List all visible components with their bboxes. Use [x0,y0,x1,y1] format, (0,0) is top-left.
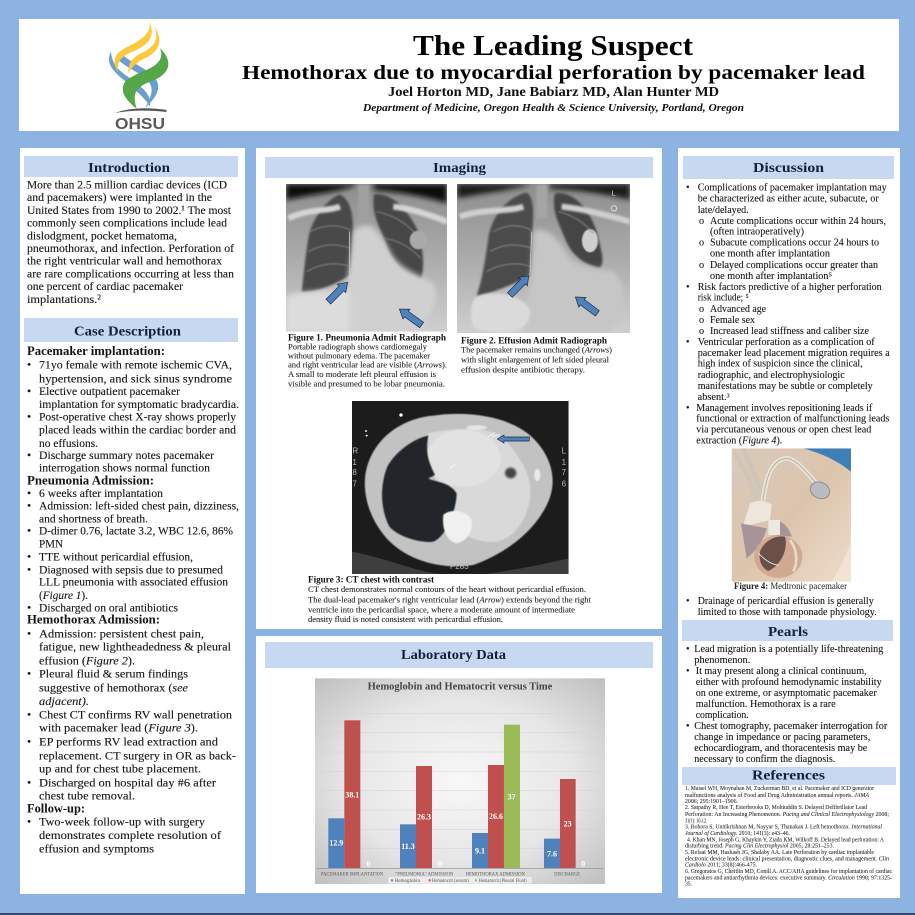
text block: pneumonia admission: • [27,600,31,614]
text block: references: 35. [685,881,692,888]
text block: hemothorax admission: EP performs RV lead extraction and [39,734,218,748]
bars: pacemaker implantation [328,720,370,868]
caption: figure 1: A small to moderate left pleural effusion is [288,369,437,379]
text block: pneumonia admission: Diagnosed with sepsis due to presumed [39,562,223,576]
panel: discussion, pearls and references [678,148,900,898]
text block: discussion: (often intraoperatively) [710,227,804,238]
text block: introduction [27,178,234,306]
text block: follow-up: Follow-up: [27,802,85,816]
text block: pacemaker implantation: • [27,448,31,462]
text block: pneumonia admission: 6 weeks after implantation [39,486,163,500]
caption: figure 2 [461,335,612,374]
figure 3: CT chest: R [352,446,358,455]
text block: hemothorax admission: suggestive of hemothorax (see [39,680,189,694]
text block: discussion: Complications of pacemaker implantation may [698,183,888,194]
text block: pneumonia admission: and shortness of breath. [39,512,148,526]
figure 3: CT chest: 1 [352,458,357,467]
bars: discharge: 0 [581,859,585,868]
caption: figure 1 [288,333,447,388]
text block: discussion: Delayed complications occur greater than [710,260,878,271]
text block: discussion: Increased lead stiffness and caliber size [710,326,869,337]
text block: discussion: o [699,304,704,315]
text block: pacemaker implantation: Pacemaker implantation: [27,344,165,358]
text block: pacemaker implantation: 71yo female with remote ischemic CVA, [39,358,232,372]
caption: figure 2: Figure 2. Effusion Admit Radiograph [461,335,607,345]
panel: laboratory data [256,636,662,893]
text block: introduction: are rare complications occurring at less than [27,266,234,280]
text block: discussion: o [699,315,704,326]
bars: pacemaker implantation: 12.9 [329,839,343,848]
heading: Laboratory Data: Laboratory Data [401,648,506,663]
text block: introduction: one percent of cardiac pacemaker [27,279,183,293]
text block: pearls [686,644,888,765]
bars: hemothorax admission [472,725,520,868]
caption: figure 3: ventricle into the pericardial space, where a moderate amount of intermediate [308,604,575,614]
text block: discussion: radiographic, and electrophysiologic [698,370,845,381]
text block: introduction: dislodgment, pocket hematoma, [27,228,177,242]
text block: pacemaker implantation: • [27,410,31,424]
text block: follow-up: effusion and symptoms [39,842,154,856]
text block: hemothorax admission: • [27,708,31,722]
text block: introduction: the right ventricular wall and hemothorax [27,254,222,268]
text block: follow-up [27,802,221,856]
heading: Imaging: Imaging [433,161,486,176]
heading: Introduction [24,156,238,177]
figure 3: CT chest: 7 [352,480,357,489]
text block: drainage bullet: limited to those with tamponade physiology. [698,607,877,618]
heading: Case Description: Case Description [74,324,181,340]
bars: pneumonia admission: 0 [438,859,442,868]
text block: pneumonia admission: • [27,498,31,512]
icon: OHSU logo [109,21,168,133]
heading: Introduction: Introduction [88,161,170,176]
text block: references: 31(1): 10-12. [685,817,707,824]
text block: pearls: complication. [696,710,749,721]
figure 2: effusion admit radiograph [457,184,630,333]
text block: pneumonia admission: PMN [39,536,63,550]
text block: pearls: echocardiogram, and thoracentesis may be [694,743,868,754]
text block: pneumonia admission: TTE without pericardial effusion, [39,550,193,564]
caption: figure 2: with slight enlargement of left sided pleural [461,354,610,364]
legend: Hematocrit (serum) [432,879,469,884]
text block: references: 2006; 295:1901–1906. [685,798,738,805]
text block: references: malfunctions analysis of Food and Drug Administration annual reports. JAMA [685,792,869,799]
bars: discharge: 7.6 [547,849,557,858]
text block: discussion: be characterized as either acute, subacute, or [698,194,879,205]
text block: discussion: o [699,238,704,249]
text block: introduction: and pacemakers) were implanted in the [27,190,212,204]
arrow [324,278,352,306]
affiliation: Department of Medicine, Oregon Health & Science University, Portland, Oregon [362,103,744,114]
icon: OHSU logo: OHSU [115,116,165,133]
text block: pearls: Lead migration is a potentially life-threatening [694,644,883,655]
text block: pacemaker implantation: Discharge summary notes pacemaker [39,448,214,462]
text block: introduction: pneumothorax, and infection. Perforation of [27,241,234,255]
text block: discussion: Subacute complications occur 24 hours to [710,238,879,249]
text block: discussion: functional or extraction of malfunctioning leads [696,414,889,425]
text block: pneumonia admission [27,474,239,614]
arrow [572,292,601,318]
text block: discussion: o [699,260,704,271]
arrow [396,304,425,330]
text block: pacemaker implantation [27,344,239,474]
text block: introduction: commonly seen complications include lead [27,216,227,230]
text block: discussion: • [686,282,690,293]
text block: references: 2. Satpathy R, Hee T, Esterbrooks D, Mohiuddin S. Delayed Defibrillator Lead [685,804,868,811]
bar chart: hemoglobin and hematocrit versus time [315,678,605,884]
text block: discussion: o [699,216,704,227]
text block: pacemaker implantation: • [27,384,31,398]
text block: discussion: pacemaker lead placement migration requires a [698,348,890,359]
text block: discussion: via percutaneous venous or open chest lead [696,425,871,436]
text block: pneumonia admission: Admission: left-sided chest pain, dizziness, [39,498,239,512]
text block: hemothorax admission: Admission: persistent chest pain, [39,626,204,640]
text block: references: 1. Maisel WH, Moynahan M, Zuckerman BD, et al. Pacemaker and ICD generator [685,785,875,792]
text block: discussion: • [686,183,690,194]
bars: discharge [544,779,585,868]
text block: discussion: high index of suspicion since the clinical, [698,359,863,370]
text block: hemothorax admission: effusion (Figure 2). [39,654,135,668]
text block: references: 6. Gregoratos G, Cheitlin MD, Conill A. ACC/AHA guidelines for implantation of cardiac [685,868,892,875]
text block: hemothorax admission: replacement. CT surgery in OR as back- [39,748,236,762]
caption: figure 3: Figure 3: CT chest with contrast [308,574,434,584]
arrow [497,435,529,443]
text block: follow-up: demonstrates complete resolution of [39,828,221,842]
text block: discussion: Risk factors predictive of a higher perforation [698,282,882,293]
figure 3: CT chest: 1 [562,458,567,467]
text block: discussion: manifestations may be subtle or completely [698,381,874,392]
text block: pacemaker implantation: Post-operative chest X-ray shows properly [39,410,236,424]
text block: discussion [686,183,890,447]
text block: hemothorax admission: adjacent). [39,694,89,708]
text block: pneumonia admission: • [27,562,31,576]
text block: pacemaker implantation: implantation for symptomatic bradycardia. [39,397,239,411]
figure 3: CT chest: L [562,446,567,455]
text block: pearls: change in impedance or pacing parameters, [694,732,870,743]
bars: hemothorax admission: 9.1 [475,847,485,856]
text block: hemothorax admission: Hemothorax Admission: [27,612,160,626]
text block: pearls: • [686,721,690,732]
text block: hemothorax admission: up and for chest tube placement. [39,762,201,776]
arrow [506,272,533,299]
title: The Leading Suspect [413,30,693,62]
text block: pneumonia admission: (Figure 1). [39,588,88,602]
caption: figure 1: without pulmonary edema. The pacemaker [288,350,430,360]
text block: discussion: absent.³ [698,392,730,403]
text block: hemothorax admission: Discharged on hospital day #6 after [39,776,216,790]
caption: figure 2: The pacemaker remains unchanged (Arrows) [461,345,612,355]
text block: references: 3. Bohora S, Unnikrishnan M, Nayyar S, Thanakan J. Left hemothorax. International [685,824,882,831]
text block: drainage bullet: • [686,596,690,607]
heading: References [682,767,896,785]
text block: pneumonia admission: • [27,486,31,500]
heading: Pearls: Pearls [768,625,809,640]
text block: hemothorax admission: • [27,626,31,640]
figure 3: CT chest: 8 [352,468,357,477]
text block: pearls: on one extreme, or asymptomatic pacemaker [696,688,877,699]
heading: Imaging [265,157,653,178]
legend: Hemoglobin [395,879,421,884]
text block: pneumonia admission: LLL pneumonia with associated effusion [39,574,228,588]
heading: Discussion: Discussion [753,161,824,176]
text block: references [685,785,892,888]
text block: pacemaker implantation: no effusions. [39,436,98,450]
text block: discussion: Advanced age [710,304,766,315]
text block: references: disturbing trend. Pacing Clin Electrophysiol 2005; 28:251–253. [685,843,834,850]
text block: pneumonia admission: • [27,550,31,564]
text block: pearls: • [686,644,690,655]
caption: figure 3 [308,574,592,624]
text block: discussion: Ventricular perforation as a complication of [698,337,875,348]
text block: references: Journal of Cardiology. 2010; 141(3): e43–46. [685,830,790,837]
text block: pneumonia admission: • [27,524,31,538]
text block: pacemaker implantation: Elective outpatient pacemaker [39,384,180,398]
caption: figure 3: CT chest demonstrates normal contours of the heart without pericardial effusion. [308,584,586,594]
figure 4: Medtronic pacemaker illustration [732,448,851,582]
text block: pearls: • [686,666,690,677]
text block: discussion: Acute complications occur within 24 hours, [710,216,886,227]
text block: introduction: More than 2.5 million cardiac devices (ICD [27,178,227,192]
text block: discussion: one month after implantation⁵ [710,271,832,282]
text block: hemothorax admission: fatigue, new lightheadedness & pleural [39,640,232,654]
text block: hemothorax admission: • [27,776,31,790]
text block: references: pacemakers and antiarrhythmia devices: executive summary. Circulation 1998; 97:1325- [685,874,892,881]
text block: pearls: It may present along a clinical continuum, [696,666,867,677]
caption: figure 1: visible and presumed to be lobar pneumonia. [288,378,445,388]
axis labels: "PNEUMONIA" ADMISSION [395,872,454,877]
text block: discussion: extraction (Figure 4). [696,436,782,447]
text block: hemothorax admission: Chest CT confirms RV wall penetration [39,708,232,722]
text block: discussion: late/delayed. [698,205,749,216]
heading: Case Description [24,318,238,342]
text block: pacemaker implantation: placed leads within the cardiac border and [39,422,236,436]
caption: figure 1: Figure 1. Pneumonia Admit Radiograph [288,333,446,343]
bars: hemothorax admission: 26.6 [489,812,503,821]
text block: introduction: United States from 1990 to 2002.¹ The most [27,203,232,217]
figure 3: CT chest: 6 [562,480,567,489]
bars: pacemaker implantation: 38.1 [345,791,359,800]
authors: Joel Horton MD, Jane Babiarz MD, Alan Hunter MD [388,84,719,99]
heading: Discussion [683,156,894,179]
bars: pneumonia admission: 11.3 [401,842,415,851]
text block: follow-up: Two-week follow-up with surgery [39,814,205,828]
axis labels [321,872,580,877]
caption: figure 1: Portable radiograph shows cardiomegaly [288,342,428,352]
text block: pearls: necessary to confirm the diagnosis. [694,754,835,765]
text block: discussion: Management involves repositioning leads if [696,403,873,414]
text block: hemothorax admission [27,612,236,802]
text block: references: electronic device leads: clinical presentation, diagnostic clues, and management. Clin [685,855,889,862]
text block: references: Perforation: An Increasing Phenomenon. Pacing and Clinical Electrophysiology 2008; [685,811,889,818]
figure 2: effusion admit radiograph: L [612,189,616,198]
header banner [19,19,899,133]
bars: hemothorax admission: 37 [508,792,516,801]
text block: references: 5. Refaat MM, Hashash JG, Shalaby AA. Late Perforation by cardiac implantable [685,849,874,856]
panel: introduction and case description [20,148,245,894]
text block: references: Cardiolo 2011; 33(8):466-475. [685,862,757,869]
text block: references: 4. Khan MN, Joseph G, Khaykin Y, Ziada KM, Wilkoff B. Delayed lead perforation: A [687,836,884,843]
text block: discussion: one month after implantation [710,249,830,260]
text block: pacemaker implantation: interrogation shows normal function [39,460,210,474]
text block: discussion: • [686,403,690,414]
text block: hemothorax admission: • [27,666,31,680]
caption: figure 1: and right ventricular lead are visible (Arrows). [288,359,447,369]
caption: figure 2: effusion despite antibiotic therapy. [461,364,585,374]
figure 3: CT chest [352,401,569,574]
text block: introduction: implantations.² [27,292,101,306]
text block: discussion: risk include; ⁵ [698,293,749,304]
figure 3: CT chest: 7 [562,468,567,477]
caption: figure 4: Figure 4: Medtronic pacemaker [734,581,847,591]
legend [388,877,532,884]
caption: figure 3: density fluid is noted consistent with pericardial effusion. [308,614,503,624]
text block: pearls: either with profound hemodynamic instability [696,677,883,688]
bars: pacemaker implantation: 0 [366,859,370,868]
bars: pneumonia admission: 26.3 [417,813,431,822]
text block: pacemaker implantation: hypertension, and sick sinus syndrome [39,372,232,386]
text block: pneumonia admission: D-dimer 0.76, lactate 3.2, WBC 12.6, 86% [39,524,233,538]
figure 1: pneumonia admit radiograph [286,184,447,332]
axis labels: DISCHARGE [554,872,580,877]
axis labels: HEMOTHORAX ADMISSION [466,872,525,877]
panel: imaging [256,148,662,629]
text block: pearls: Chest tomography, pacemaker interrogation for [694,721,888,732]
subtitle: Hemothorax due to myocardial perforation by pacemaker lead [242,62,865,84]
legend: Hematocrit (Pleural Fluid) [479,879,527,884]
text block: pneumonia admission: Discharged on oral antibiotics [39,600,178,614]
text block: pearls: phenomenon. [694,655,750,666]
bars: discharge: 23 [564,820,572,829]
text block: hemothorax admission: • [27,734,31,748]
text block: pearls: malfunction. Hemothorax is a rare [696,699,836,710]
text block: hemothorax admission: chest tube removal. [39,788,135,802]
bars: pneumonia admission [400,766,442,868]
text block: discussion: • [686,337,690,348]
text block: follow-up: • [27,814,31,828]
chart title: Hemoglobin and Hematocrit versus Time [368,681,552,693]
text block: hemothorax admission: Pleural fluid & serum findings [39,666,188,680]
text block: pneumonia admission: Pneumonia Admission: [27,474,154,488]
axis labels: PACEMAKER IMPLANTATION [321,872,384,877]
figure 3: CT chest: P283 [450,562,469,571]
text block: hemothorax admission: with pacemaker lead ( Figure 3). [39,720,198,734]
text block: drainage bullet: Drainage of pericardial effusion is generally [698,596,875,607]
text block: discussion: o [699,326,704,337]
text block: discussion: Female sex [710,315,755,326]
heading: References: References [752,768,826,784]
caption: figure 3: The dual-lead pacemaker's right ventricular lead (Arrow) extends beyond the right [308,595,592,605]
heading: Laboratory Data [265,642,653,668]
text block: pacemaker implantation: • [27,358,31,372]
heading: Pearls [682,620,893,641]
text block: drainage bullet [686,596,877,618]
